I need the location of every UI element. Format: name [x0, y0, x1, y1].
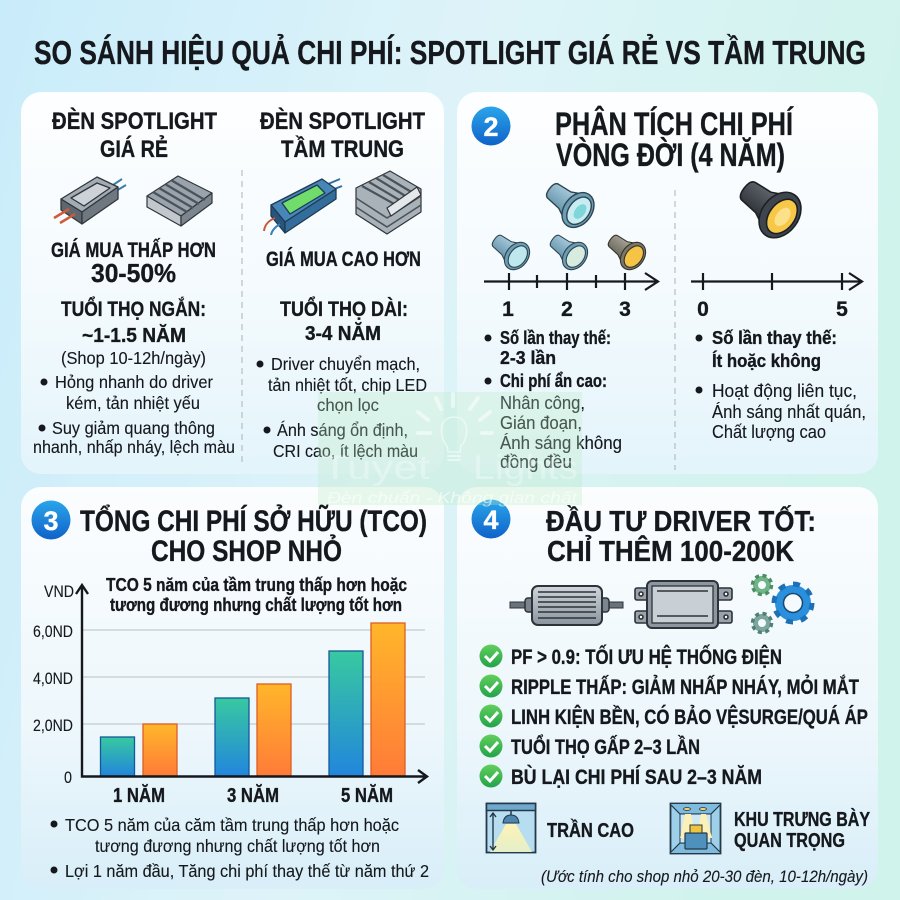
price: cheap: [51, 239, 216, 288]
icon: cheap heatsink: [147, 176, 212, 226]
x axis labels: [113, 784, 393, 807]
watermark: Tuyet: [322, 449, 431, 487]
bars: 1 year: [100, 724, 177, 776]
watermark: Lights: [473, 449, 578, 487]
icon: large dark quality spot: [729, 168, 810, 246]
timeline labels: cheap: 1: [502, 298, 514, 321]
bullets: cheap lifecycle: Chi phí ẩn cao:: [500, 371, 607, 391]
watermark: [318, 392, 582, 507]
label: display area: QUAN TRỌNG: [734, 830, 845, 852]
chart subtitle: TCO 5 năm của tầm trung thấp hơn hoặc: [106, 575, 407, 595]
bullets: mid-range lifecycle: Số lần thay thế:: [712, 328, 837, 348]
y axis labels: [33, 582, 74, 787]
heading: PHÂN TÍCH CHI PHÍ: [555, 106, 794, 142]
bullets: mid-range lifecycle: Ánh sáng nhất quán,: [712, 402, 866, 422]
item: lifespan: [480, 734, 700, 759]
bullets: mid-range: Ánh sáng ổn định,: [277, 420, 408, 440]
timeline labels: cheap: 2: [561, 298, 573, 321]
icon: small spot year 2: [544, 227, 593, 275]
item: PF: PF > 0.9: TỐI ƯU HỆ THỐNG ĐIỆN: [511, 645, 782, 669]
bullets: cheap lifecycle: [484, 328, 622, 472]
y axis labels: 0: [64, 768, 72, 787]
icon: large blue spot: [538, 173, 601, 234]
label: display area: KHU TRƯNG BÀY: [734, 808, 871, 831]
item: payback: BÙ LẠI CHI PHÍ SAU 2–3 NĂM: [511, 765, 762, 789]
price: mid-range: GIÁ MUA CAO HƠN: [266, 248, 421, 271]
price: cheap: 30-50%: [91, 258, 176, 288]
heading: [555, 106, 794, 173]
bullets: cheap: kém, tản nhiệt yếu: [66, 393, 200, 413]
icon: capacitor driver: [510, 586, 623, 625]
lifespan: cheap: TUỔI THỌ NGẮN:: [61, 297, 206, 321]
heading: [546, 504, 816, 568]
label: display area: [734, 808, 871, 852]
heading: mid-range spotlight: [260, 107, 425, 163]
bullets: cheap lifecycle: Số lần thay thế:: [500, 328, 611, 348]
icon: small spot year 3: [602, 227, 651, 275]
bullets: TCO notes: tương đương nhưng chất lượng tốt hơn: [95, 836, 380, 856]
timeline: mid-range: [691, 273, 862, 290]
badge 3: 3: [43, 506, 59, 536]
bullets: mid-range: Driver chuyển mạch,: [271, 354, 420, 374]
heading: CHỈ THÊM 100-200K: [547, 534, 794, 568]
item: lifespan: TUỔI THỌ GẤP 2–3 LẦN: [511, 735, 700, 759]
chart subtitle: [106, 575, 407, 615]
heading: cheap spotlight: [52, 107, 217, 163]
icon: display area: [670, 804, 721, 854]
label: high ceiling: TRẦN CAO: [547, 819, 634, 842]
bullets: TCO notes: [50, 815, 429, 881]
lifespan: mid-range: TUỔI THỌ DÀI:: [280, 297, 408, 321]
bullets: cheap: [33, 372, 235, 457]
badge 4: [472, 500, 510, 538]
bullets: mid-range lifecycle: Ít hoặc không: [712, 350, 821, 371]
badge 3: [32, 500, 70, 540]
x axis labels: 5 NĂM: [341, 784, 393, 807]
timeline labels: mid-range: 5: [836, 298, 848, 321]
bullets: mid-range: tản nhiệt tốt, chip LED: [268, 375, 427, 395]
heading: cheap spotlight: ĐÈN SPOTLIGHT: [52, 107, 217, 135]
bullets: cheap lifecycle: Nhân công,: [500, 393, 585, 413]
lifespan: cheap: ~1-1.5 NĂM: [82, 324, 186, 347]
panel: total cost of ownership: [21, 487, 444, 889]
y axis labels: 4,0ND: [33, 669, 73, 688]
icon: gears: [752, 576, 812, 632]
timeline labels: mid-range: [697, 298, 848, 321]
y axis labels: 6,0ND: [33, 622, 73, 641]
bullets: cheap lifecycle: Ánh sáng không: [500, 433, 622, 453]
y axis labels: VND: [44, 582, 74, 601]
bullets: cheap lifecycle: Gián đoạn,: [500, 413, 582, 433]
heading: TỔNG CHI PHÍ SỞ HỮU (TCO): [80, 504, 427, 538]
badge 2: 2: [483, 112, 499, 142]
bullets: cheap lifecycle: đồng đều: [500, 452, 572, 472]
lifespan: cheap: (Shop 10-12h/ngày): [61, 348, 206, 368]
icon: enclosed driver: [635, 581, 732, 628]
bullets: TCO notes: Lợi 1 năm đầu, Tăng chi phí thay thế từ năm thứ 2: [65, 861, 429, 881]
bars: 3 years: [215, 684, 291, 776]
chart subtitle: tương đương nhưng chất lượng tốt hơn: [110, 595, 402, 615]
heading: CHO SHOP NHỎ: [151, 534, 342, 568]
checklist: [480, 644, 868, 789]
icon: high ceiling: [486, 804, 536, 852]
bullets: cheap: Hỏng nhanh do driver: [55, 372, 213, 392]
panel: good driver investment: [457, 487, 878, 889]
badge 4: 4: [483, 505, 499, 535]
timeline labels: cheap: 3: [619, 298, 631, 321]
lifespan: cheap: [61, 297, 206, 368]
x axis labels: 1 NĂM: [113, 784, 165, 807]
bars: 5 years: [329, 623, 405, 776]
bullets: mid-range lifecycle: Chất lượng cao: [712, 422, 826, 442]
heading: cheap spotlight: GIÁ RẺ: [100, 134, 168, 163]
timeline labels: mid-range: 0: [697, 298, 709, 321]
timeline labels: cheap: [502, 298, 631, 321]
icon: mid-range heatsink: [356, 171, 421, 234]
bullets: cheap: nhanh, nhấp nháy, lệch màu: [33, 437, 235, 457]
icon: small spot year 1: [486, 227, 535, 275]
bullets: mid-range lifecycle: Hoạt động liên tục,: [712, 381, 857, 401]
bullets: TCO notes: TCO 5 năm của căm tầm trung thấp hơn hoặc: [65, 815, 399, 835]
bullets: mid-range lifecycle: [696, 328, 866, 442]
lifespan: mid-range: 3-4 NĂM: [305, 322, 381, 345]
timeline: cheap: [484, 273, 658, 290]
panel: comparison of cheap and mid-range spotlights: [21, 92, 444, 474]
y axis labels: 2,0ND: [33, 716, 73, 735]
item: PF: [480, 644, 782, 669]
bullets: mid-range: chọn lọc: [317, 395, 379, 415]
x axis labels: 3 NĂM: [227, 784, 279, 807]
watermark: Đèn chuẩn - Không gian chất: [327, 489, 578, 507]
badge 2: [472, 106, 510, 146]
icon: mid-range driver: [264, 179, 342, 235]
heading: VÒNG ĐỜI (4 NĂM): [556, 137, 785, 173]
bullets: mid-range: [256, 354, 427, 461]
heading: mid-range spotlight: ĐÈN SPOTLIGHT: [260, 107, 425, 135]
bullets: mid-range: CRI cao, ít lệch màu: [273, 441, 418, 461]
icon: cheap driver: [54, 177, 126, 224]
bullets: cheap: Suy giảm quang thông: [52, 418, 215, 438]
lifespan: mid-range: [280, 297, 408, 345]
heading: mid-range spotlight: TẦM TRUNG: [281, 135, 404, 163]
panel: lifecycle cost analysis: [457, 92, 878, 474]
axes: [76, 585, 427, 783]
heading: ĐẦU TƯ DRIVER TỐT:: [546, 504, 816, 538]
bullets: cheap lifecycle: 2-3 lần: [500, 348, 556, 368]
price: cheap: GIÁ MUA THẤP HƠN: [51, 239, 216, 262]
heading: [80, 504, 427, 568]
bar chart: [33, 582, 427, 807]
footnote: (Ước tính cho shop nhỏ 20-30 đèn, 10-12h/ngày): [541, 867, 868, 886]
